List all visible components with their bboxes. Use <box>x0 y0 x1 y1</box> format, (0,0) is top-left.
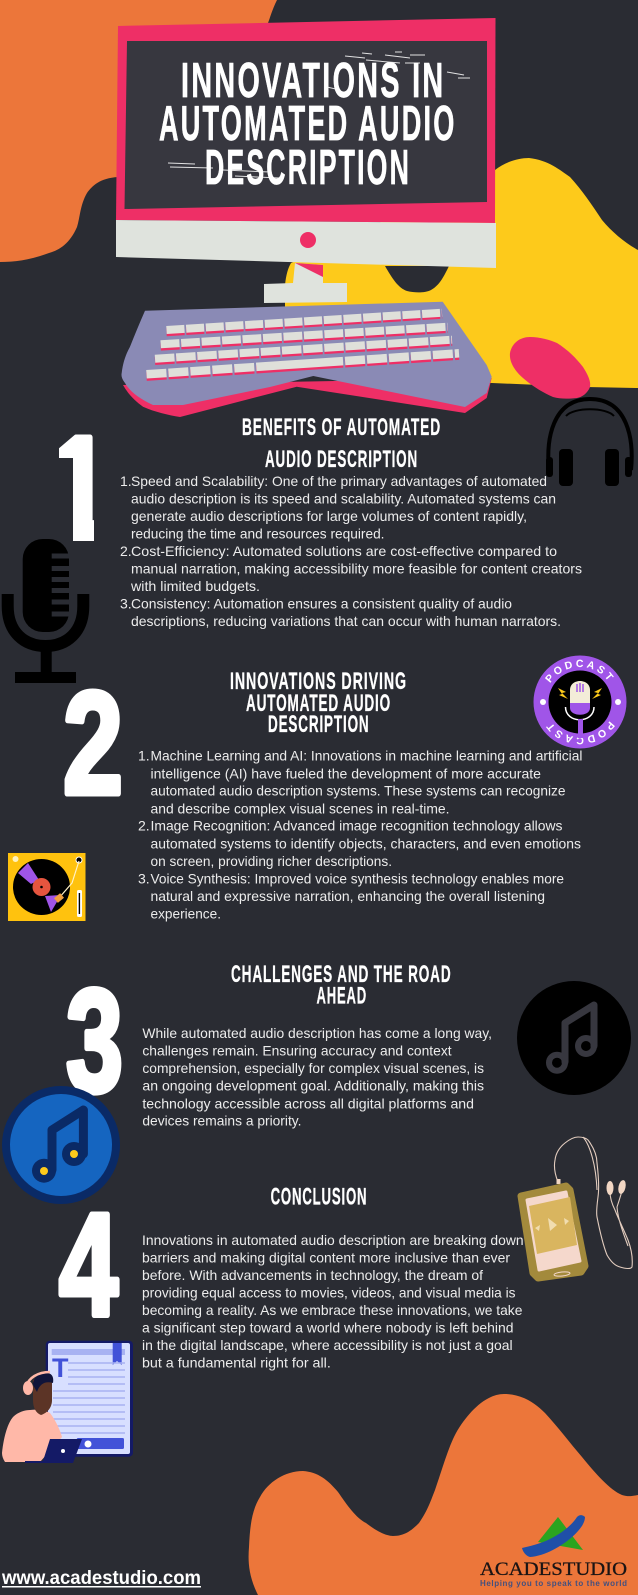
section 3 text <box>142 1025 492 1129</box>
icon: headphones <box>546 399 632 486</box>
section 4 text: but a fundamental right for all. <box>142 1355 331 1371</box>
section 2 text: natural and expressive narration, enhancing the overall listening <box>150 888 545 904</box>
section 3 text: While automated audio description has come a long way, <box>142 1025 492 1041</box>
section 2 text: Machine Learning and AI: Innovations in machine learning and artificial <box>150 748 582 764</box>
section 1 heading: BENEFITS OF AUTOMATED <box>242 414 441 441</box>
logo wordmark: ACADESTUDIO <box>480 1559 627 1580</box>
section 4 text: Innovations in automated audio description are breaking down <box>142 1232 524 1248</box>
keyboard base <box>121 302 492 417</box>
panel: desktop computer illustration <box>116 18 590 417</box>
section 1 heading: AUDIO DESCRIPTION <box>265 446 418 473</box>
section 4 text: providing equal access to movies, videos, and visual media is <box>142 1285 516 1301</box>
title glitch strokes <box>168 52 470 178</box>
laptop <box>25 1439 82 1463</box>
section 2 text: 2. <box>138 818 150 834</box>
section 1 heading <box>242 414 441 473</box>
orange blob bottom right <box>249 1394 638 1595</box>
monitor screen <box>124 41 487 209</box>
icon: person with tablet <box>2 1341 133 1463</box>
logo <box>480 1515 627 1588</box>
logo tagline: Helping you to speak to the world <box>480 1579 627 1588</box>
section 1 text: Speed and Scalability: One of the primary advantages of automated <box>131 473 547 489</box>
section 3 heading: CHALLENGES AND THE ROAD <box>231 961 452 988</box>
section 2 text <box>138 748 582 922</box>
section 2 text: experience. <box>150 906 221 922</box>
numeral 4: 4 <box>59 1183 118 1346</box>
section 2 heading: AUTOMATED AUDIO <box>246 690 391 717</box>
play controls <box>535 1218 569 1231</box>
section 2 text: 3. <box>138 870 150 886</box>
numeral 1: 1 <box>49 406 111 569</box>
yellow blob behind monitor <box>285 158 638 388</box>
phone screen <box>527 1192 580 1270</box>
section 4 text: barriers and making digital content more inclusive than ever <box>142 1249 510 1265</box>
section 1 text: reducing the time and resources required. <box>131 526 384 542</box>
icon: podcast badge: PODCAST <box>545 660 614 683</box>
section 1 text: 2. <box>120 543 132 559</box>
stand shadow <box>295 263 323 277</box>
section 3 heading: AHEAD <box>316 982 367 1009</box>
numeral 3: 3 <box>66 959 123 1122</box>
title <box>159 52 470 195</box>
section 2 text: and describe complex visual scenes in real-time. <box>150 800 450 816</box>
numeral 2: 2 <box>63 662 123 824</box>
section 2 text: automated systems to identify objects, characters, and even emotions <box>150 835 581 851</box>
orange blob top left <box>0 0 277 262</box>
section 3 heading <box>231 961 452 1009</box>
section 2 text: Image Recognition: Advanced image recognition technology allows <box>150 818 562 834</box>
section 1 text: Cost-Efficiency: Automated solutions are cost-effective compared to <box>131 543 557 559</box>
icon: phone with earphones <box>521 1137 632 1278</box>
section 3 text: challenges remain. Ensuring accuracy and context <box>142 1043 452 1059</box>
icon: turntable <box>8 853 86 921</box>
monitor power dot <box>300 232 316 248</box>
section 1 text <box>120 473 582 629</box>
section 4 text <box>142 1232 524 1371</box>
earphone wires <box>554 1137 632 1268</box>
section 1 text: generate audio descriptions for large volumes of content rapidly, <box>131 508 527 524</box>
section 3 text: technology accessible across all digital platforms and <box>142 1095 474 1111</box>
section 1 text: Consistency: Automation ensures a consistent quality of audio <box>131 596 512 612</box>
section 1 text: with limited budgets. <box>130 578 260 594</box>
section 2 text: on screen, providing richer descriptions. <box>150 853 392 869</box>
section 4 heading: CONCLUSION <box>271 1184 367 1210</box>
notch in yellow blob <box>385 266 449 292</box>
section 4 text: becoming a reality. As we embrace these innovations, we take <box>142 1302 523 1318</box>
section 4 text: a significant step toward a world where nobody is left behind <box>142 1320 514 1336</box>
person <box>2 1372 82 1463</box>
section 1 text: 3. <box>120 596 132 612</box>
icon: blue music note circle <box>2 1086 120 1204</box>
keyboard keys <box>146 313 459 377</box>
monitor frame <box>116 18 496 223</box>
section 2 heading: INNOVATIONS DRIVING <box>230 668 407 695</box>
icon: black music note circle <box>517 981 631 1095</box>
section 4 text: before. With advancements in technology, the dream of <box>142 1267 483 1283</box>
tablet: T <box>52 1353 69 1383</box>
website link: www.acadestudio.com <box>1 1568 201 1589</box>
icon: podcast badge: PODCAST <box>546 721 615 744</box>
mouse <box>510 337 590 399</box>
section 2 heading <box>230 668 407 738</box>
logo mark <box>522 1515 585 1557</box>
section 4 text: in the digital landscape, where accessibility is not just a goal <box>142 1337 513 1353</box>
title: DESCRIPTION <box>205 141 411 195</box>
section 2 heading: DESCRIPTION <box>268 711 370 738</box>
section 1 text: descriptions, reducing variations that can occur with human narrators. <box>131 613 561 629</box>
phone body <box>521 1186 585 1278</box>
section 2 text: 1. <box>138 748 150 764</box>
monitor chin <box>116 220 496 268</box>
section 2 text: Voice Synthesis: Improved voice synthesis technology enables more <box>150 870 564 886</box>
section 1 text: manual narration, making accessibility more feasible for content creators <box>131 560 582 576</box>
section 3 text: devices remains a priority. <box>142 1113 302 1129</box>
title: INNOVATIONS IN <box>181 54 446 108</box>
monitor stand <box>264 263 347 303</box>
section 1 text: 1. <box>120 473 132 489</box>
section 2 text: automated audio description systems. These systems can recognize <box>150 783 566 799</box>
icon: podcast badge <box>534 656 626 748</box>
section 1 text: audio description is its speed and scalability. Automated systems can <box>131 490 556 506</box>
section 3 text: an ongoing development goal. Additionally, making this <box>142 1078 484 1094</box>
section 3 text: comprehension, especially for complex visual scenes, is <box>142 1060 484 1076</box>
section 2 text: intelligence (AI) have fueled the development of more accurate <box>150 765 541 781</box>
icon: microphone <box>8 539 83 683</box>
